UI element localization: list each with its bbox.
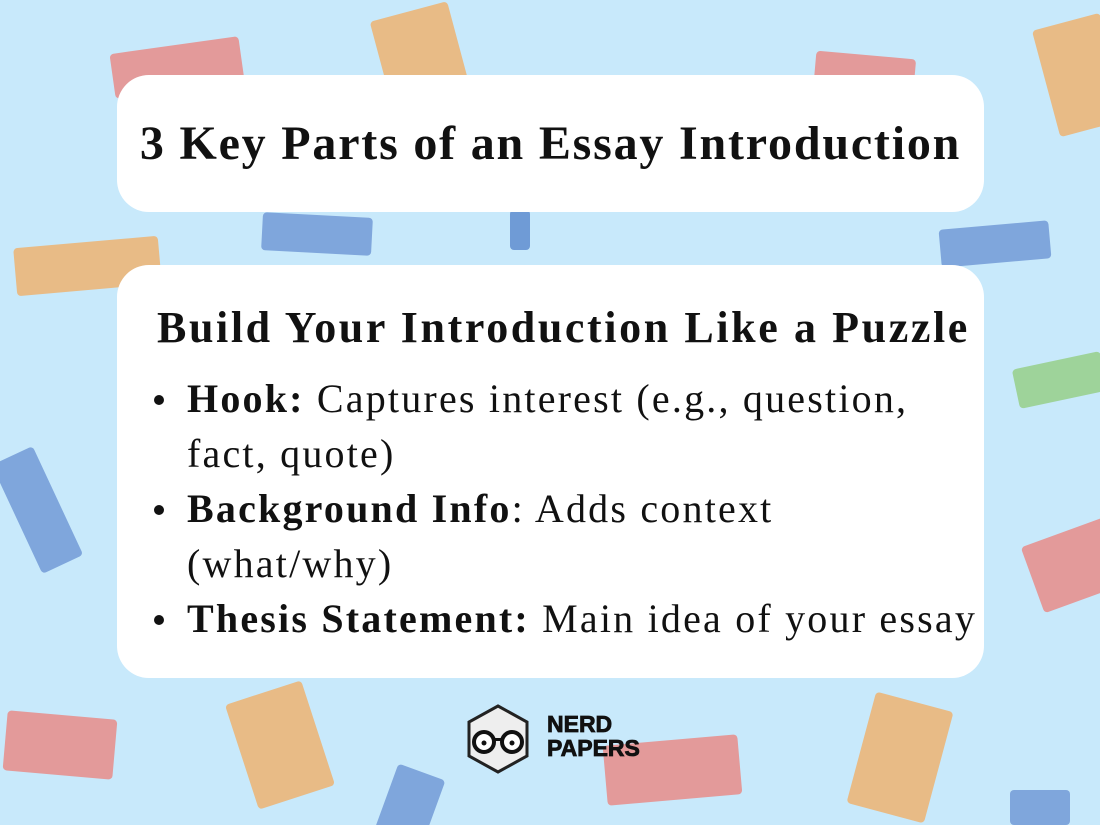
bullet list	[154, 376, 977, 641]
logo text	[547, 711, 640, 761]
title: 3 Key Parts of an Essay Introduction	[140, 117, 961, 170]
bullet list: Background Info: Adds context	[187, 486, 774, 531]
title panel	[117, 75, 984, 212]
panel: content	[117, 265, 984, 678]
bullet list: (what/why)	[187, 541, 393, 586]
bullet list: fact, quote)	[187, 431, 396, 476]
logo text: NERD	[547, 711, 612, 737]
bullet list: Thesis Statement: Main idea of your essay	[187, 596, 977, 641]
bullet list: Hook: Captures interest (e.g., question,	[187, 376, 908, 421]
heading: Build Your Introduction Like a Puzzle	[157, 303, 970, 352]
logo	[468, 704, 640, 774]
logo text: PAPERS	[547, 735, 640, 761]
icon: nerd hexagon	[468, 704, 528, 774]
